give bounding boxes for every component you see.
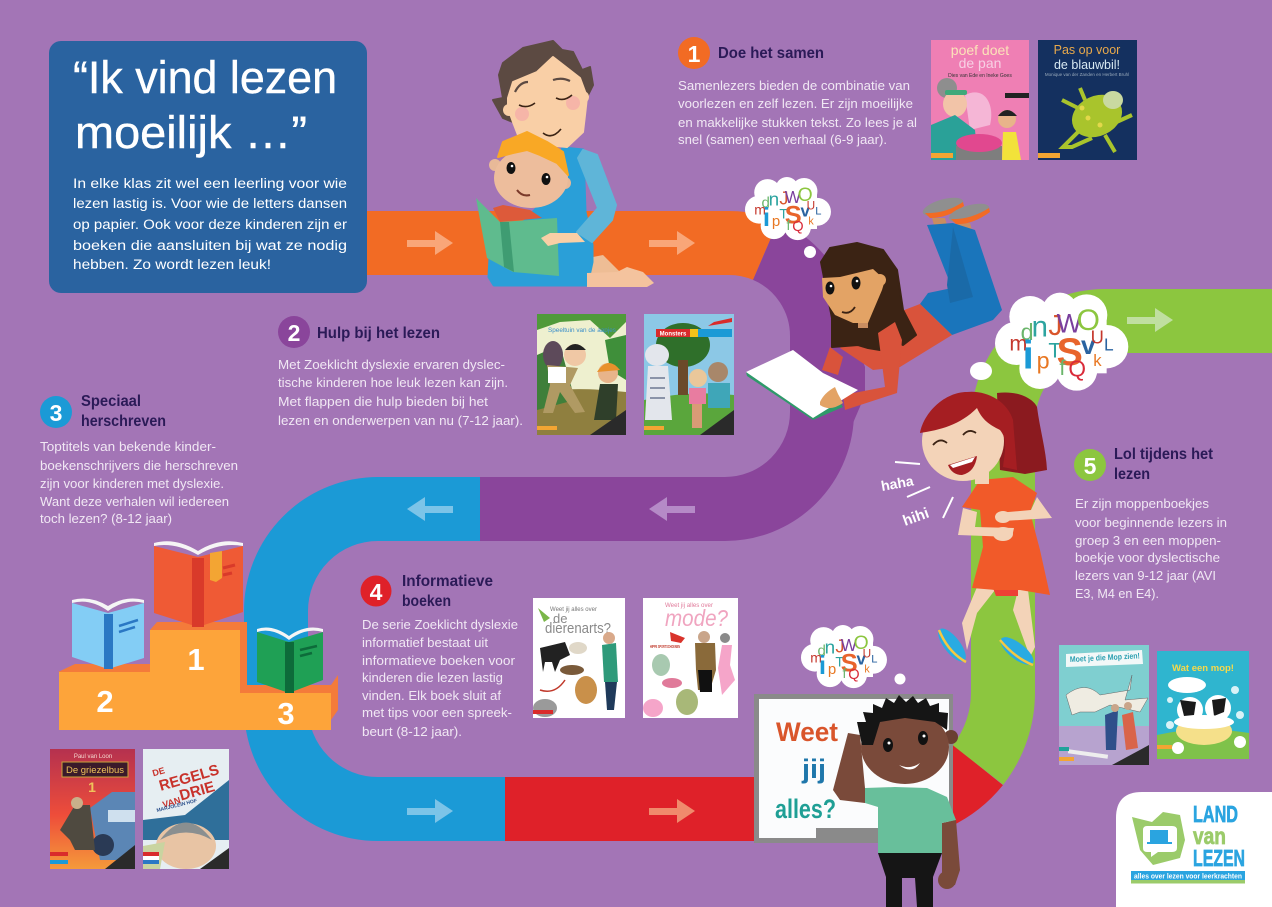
podium with books xyxy=(58,541,338,731)
text 3: Want deze verhalen wil iedereen xyxy=(40,494,229,509)
book cover: de griezelbus: De griezelbus xyxy=(66,765,124,776)
heading 3 xyxy=(81,393,166,430)
laughter labels xyxy=(880,462,953,530)
thought bubble: girl lying: k xyxy=(808,215,814,227)
icon: red book xyxy=(154,541,243,627)
thought bubble: girl lying: v xyxy=(800,202,810,221)
thought bubble: girl lying: i xyxy=(763,204,770,232)
badge 5: 5 xyxy=(1084,453,1097,479)
illustration: boy scratching head xyxy=(833,695,960,907)
book cover: de griezelbus xyxy=(50,749,135,869)
thought bubble: laughing girl: d xyxy=(1021,319,1034,345)
thought bubble: boy: f xyxy=(842,665,846,681)
book cover: de regels van drie: DE xyxy=(151,765,166,778)
book cover: pas op voor de blauwbil: Pas op voor xyxy=(1054,43,1120,57)
book cover: de dierenarts: Weet jij alles over xyxy=(550,606,598,613)
thought bubble: boy: k xyxy=(864,663,870,675)
section 4 xyxy=(360,573,518,739)
podium numbers xyxy=(96,642,295,731)
book cover: pas op voor de blauwbil: Monique van der Zanden en Herbert Bruhl xyxy=(1045,72,1129,77)
text 4: informatief bestaat uit xyxy=(362,635,488,650)
book cover: poef doet de pan: poef doet xyxy=(951,42,1009,58)
whiteboard text: alles? xyxy=(775,794,836,824)
illustration: girl lying down and reading xyxy=(746,194,1002,420)
thought bubble: boy: n xyxy=(825,637,835,658)
heading 5: lezen xyxy=(1114,466,1150,483)
book cover: monsters en ... xyxy=(644,314,734,435)
text 5: voor beginnende lezers in xyxy=(1075,515,1227,530)
heading 3: Speciaal xyxy=(81,393,141,410)
logo wordmark: van xyxy=(1193,823,1226,849)
section 3 xyxy=(40,393,238,526)
heading 4: boeken xyxy=(402,593,451,610)
text 1 xyxy=(678,78,917,147)
book cover: mode: mode? xyxy=(665,605,728,631)
thought bubble: laughing girl: W xyxy=(1057,309,1083,339)
thought puff: laughing girl xyxy=(970,362,992,380)
thought bubble: laughing girl: T xyxy=(1048,337,1062,362)
badge 3: 3 xyxy=(50,400,62,426)
book cover: mode xyxy=(643,598,738,718)
thought bubble: laughing girl: S xyxy=(1057,330,1083,374)
thought bubble: boy: S xyxy=(841,650,858,678)
logo wordmark xyxy=(1193,801,1245,871)
thought bubble: boy: m xyxy=(810,649,822,665)
section 2 xyxy=(278,316,523,428)
text 5: lezers van 9-12 jaar (AVI xyxy=(1075,568,1216,583)
book cover: pas op voor de blauwbil: de blauwbil! xyxy=(1054,58,1120,72)
text 1: snel (samen) een verhaal (6-9 jaar). xyxy=(678,132,887,147)
thought bubble: boy: p xyxy=(828,661,836,678)
book cover: mode: Weet jij alles over xyxy=(665,602,714,609)
thought bubble: girl lying: f xyxy=(786,217,790,233)
book cover: de regels van drie: REGELS xyxy=(157,761,221,795)
book cover: moet je die mop zien xyxy=(1059,645,1149,765)
whiteboard text xyxy=(775,717,838,824)
thought bubble: boy: T xyxy=(835,654,844,670)
text 5: Er zijn moppenboekjes xyxy=(1075,496,1209,511)
heading 3: herschreven xyxy=(81,413,166,430)
thought bubble: girl lying: L xyxy=(815,205,821,217)
book cover: de regels van drie: VAN xyxy=(161,795,182,810)
logo: Land van Lezen xyxy=(1116,792,1272,907)
thought bubble: laughing girl: U xyxy=(1091,326,1104,347)
text 4: beurt (8-12 jaar). xyxy=(362,724,462,739)
book cover: de regels van drie xyxy=(143,749,229,869)
thought bubble: girl lying: p xyxy=(772,213,780,230)
text 2: Met flappen die hulp bieden bij het xyxy=(278,394,488,409)
text 5: groep 3 en een moppen- xyxy=(1075,533,1221,548)
thought bubble: girl lying: O xyxy=(798,184,813,206)
thought bubble: laughing girl: O xyxy=(1077,304,1100,337)
thought bubble: laughing girl: p xyxy=(1037,347,1050,373)
thought bubble: laughing girl: L xyxy=(1104,335,1114,355)
illustration: whiteboard xyxy=(754,694,953,843)
logo wordmark: LEZEN xyxy=(1193,845,1245,871)
book cover: monsters en ...: Monsters xyxy=(660,332,687,338)
thought bubble: girl lying: Q xyxy=(792,219,804,235)
podium numbers: 3 xyxy=(277,696,295,731)
text 4: met tips voor een spreek- xyxy=(362,705,512,720)
badge 1 xyxy=(678,37,710,69)
book cover: de griezelbus: 1 xyxy=(88,779,96,795)
thought bubble: laughing girl: m xyxy=(1009,331,1027,356)
book cover: de dierenarts: dierenarts? xyxy=(545,620,611,637)
card intro text xyxy=(73,176,348,272)
book cover: pas op voor de blauwbil xyxy=(1038,40,1137,160)
book cover: de dierenarts xyxy=(533,598,625,718)
heading 5 xyxy=(1114,446,1213,483)
thought bubble: boy: i xyxy=(819,652,826,680)
thought bubble: laughing girl xyxy=(995,293,1128,391)
thought puff: girl lying xyxy=(804,246,816,258)
book cover: speeltuin van de aapjes: Speeltuin van de aapjes xyxy=(548,327,617,334)
thought bubble: laughing girl: Q xyxy=(1068,356,1086,382)
winding reading path xyxy=(276,243,1272,809)
logo tagline: alles over lezen voor leerkrachten xyxy=(1134,874,1242,880)
heading 4 xyxy=(402,573,493,610)
text 4: informatieve boeken voor xyxy=(362,653,516,668)
heading 5: Lol tijdens het xyxy=(1114,446,1213,463)
card intro text: boeken die aansluiten bij wat ze nodig xyxy=(73,238,347,253)
section 1 xyxy=(678,37,917,147)
arrow: purple xyxy=(649,497,695,521)
icon: green book xyxy=(257,628,323,693)
text 3: toch lezen? (8-12 jaar) xyxy=(40,511,172,526)
thought bubble: laughing girl: n xyxy=(1032,311,1048,344)
arrow: green xyxy=(1127,308,1173,332)
thought bubble: boy: J xyxy=(835,635,845,656)
thought bubble: laughing girl: i xyxy=(1023,333,1034,377)
text 4: vinden. Elk boek sluit af xyxy=(362,688,501,703)
thought bubble: girl lying: m xyxy=(754,201,766,217)
whiteboard text: jij xyxy=(801,754,826,784)
text 5 xyxy=(1075,496,1227,601)
whiteboard text: Weet xyxy=(776,717,838,747)
thought bubble: boy: L xyxy=(871,653,877,665)
heading 1: Doe het samen xyxy=(718,45,824,62)
card intro text: lezen lastig is. Voor wie de letters dansen xyxy=(73,196,347,211)
text 3: zijn voor kinderen met dyslexie. xyxy=(40,476,224,491)
illustration: laughing girl xyxy=(920,392,1052,670)
text 2: lezen en onderwerpen van nu (7-12 jaar). xyxy=(278,413,523,428)
badge 4: 4 xyxy=(370,579,383,605)
logo icon: book with screen xyxy=(1132,812,1185,865)
book cover: de regels van drie: DRIE xyxy=(178,778,217,805)
arrow: blue bottom xyxy=(407,799,453,823)
text 5: E3, M4 en E4). xyxy=(1075,586,1159,601)
book cover: de dierenarts: de xyxy=(553,611,567,626)
book cover: wat een mop: Wat een mop! xyxy=(1172,663,1234,674)
text 3: Toptitels van bekende kinder- xyxy=(40,439,216,454)
thought bubble: boy xyxy=(801,625,887,688)
thought puff: boy xyxy=(894,674,906,684)
thought bubble: boy: v xyxy=(856,650,866,669)
heading 2: Hulp bij het lezen xyxy=(317,325,440,342)
podium numbers: 2 xyxy=(96,684,114,719)
book cover: speeltuin van de aapjes xyxy=(537,314,626,435)
text 2: Met Zoeklicht dyslexie ervaren dyslec- xyxy=(278,357,505,372)
logo wordmark: LAND xyxy=(1193,801,1238,827)
card intro text: hebben. Zo wordt lezen leuk! xyxy=(73,257,271,272)
thought bubble: boy: O xyxy=(854,632,869,654)
podium numbers: 1 xyxy=(187,642,205,677)
arrow: orange start xyxy=(407,231,453,255)
arrow: red xyxy=(649,799,695,823)
section 5 xyxy=(1074,446,1227,601)
thought bubble: girl lying: d xyxy=(762,195,770,212)
arrow: orange end xyxy=(649,231,695,255)
card intro text: op papier. Ook voor deze kinderen zijn er xyxy=(73,217,348,232)
badge 2: 2 xyxy=(288,320,300,346)
book cover: mode: HIPPE SPORTSCHOENEN xyxy=(650,644,680,649)
book cover: poef doet de pan: Dies van Ede en Ineke Goes xyxy=(948,73,1012,79)
badge 3 xyxy=(40,396,72,428)
text 4: De serie Zoeklicht dyslexie xyxy=(362,617,518,632)
thought bubble: girl lying: J xyxy=(779,187,789,208)
book cover: poef doet de pan xyxy=(931,40,1029,160)
thought bubble: girl lying xyxy=(745,177,831,240)
text 2 xyxy=(278,357,523,428)
badge 5 xyxy=(1074,449,1106,481)
text 3 xyxy=(40,439,238,526)
logo tagline xyxy=(1131,871,1245,884)
arrow: blue top xyxy=(407,497,453,521)
title card xyxy=(49,41,367,293)
laughter labels: haha xyxy=(880,472,915,494)
card heading: moeilijk …” xyxy=(75,107,307,158)
thought bubble: girl lying: T xyxy=(779,206,788,222)
heading 4: Informatieve xyxy=(402,573,493,590)
text 4 xyxy=(362,617,518,739)
book cover: poef doet de pan: de pan xyxy=(959,55,1001,71)
laughter labels: hihi xyxy=(901,505,931,530)
card heading xyxy=(73,52,337,158)
text 2: tische kinderen hoe leuk lezen kan zijn. xyxy=(278,375,508,390)
badge 1: 1 xyxy=(688,41,701,67)
card heading: “Ik vind lezen xyxy=(73,52,337,103)
thought bubble: girl lying: n xyxy=(769,189,779,210)
thought bubble: laughing girl: v xyxy=(1081,330,1096,360)
badge 4 xyxy=(360,576,392,606)
text 1: Samenlezers bieden de combinatie van xyxy=(678,78,910,93)
thought bubble: girl lying: W xyxy=(785,187,802,207)
thought bubble: girl lying: S xyxy=(785,202,802,230)
text 4: kinderen die lezen lastig xyxy=(362,670,503,685)
thought bubble: boy: U xyxy=(863,647,871,661)
book cover: moet je die mop zien: Moet je die Mop zien! xyxy=(1070,651,1140,664)
illustration: mother reading with child xyxy=(476,41,654,287)
thought bubble: boy: d xyxy=(818,642,826,659)
thought bubble: laughing girl: k xyxy=(1093,351,1102,370)
book cover: de griezelbus: Paul van Loon xyxy=(74,754,112,760)
thought bubble: boy: Q xyxy=(848,667,860,683)
text 3: boekenschrijvers die herschreven xyxy=(40,458,238,473)
book cover: de regels van drie: MARJOLEIN HOF xyxy=(156,798,198,814)
thought bubble: laughing girl: J xyxy=(1048,310,1062,342)
thought bubble: boy: W xyxy=(841,635,858,655)
thought bubble: laughing girl: f xyxy=(1059,355,1066,380)
book cover: wat een mop xyxy=(1157,651,1249,759)
text 5: boekje voor dyslectische xyxy=(1075,550,1220,565)
text 1: en makkelijke stukken tekst. Zo lees je al xyxy=(678,115,917,130)
badge 2 xyxy=(278,316,310,348)
thought bubble: girl lying: U xyxy=(807,199,815,213)
icon: blue book xyxy=(72,598,144,669)
card intro text: In elke klas zit wel een leerling voor wie xyxy=(73,176,347,191)
text 1: voorlezen en zelf lezen. Er zijn moeilijke xyxy=(678,96,913,111)
